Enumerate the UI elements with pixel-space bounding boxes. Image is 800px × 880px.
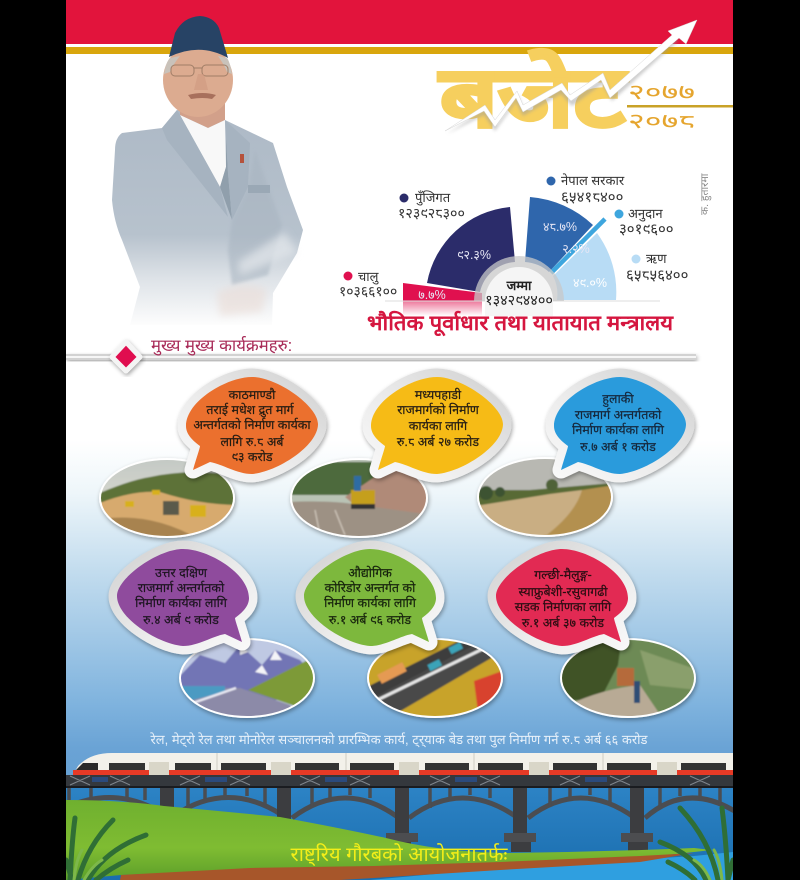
year labels <box>627 81 733 133</box>
percent labels: ९२.३% <box>457 248 491 262</box>
photo: excavation site <box>95 455 240 540</box>
illustration: city flyover <box>365 636 505 720</box>
train <box>73 753 733 775</box>
section heading rule <box>66 354 696 360</box>
header band <box>66 0 733 54</box>
total label <box>485 278 553 309</box>
credit label: क. हुतारमा <box>699 173 712 215</box>
segment: nepal government <box>525 197 593 272</box>
legend: nepal government: नेपाल सरकार <box>561 173 625 188</box>
icon: red diamond <box>112 342 140 371</box>
photo: excavator on hillside <box>288 455 432 540</box>
bubble: industrial corridor: कोरिडोर अन्तर्गत को <box>325 580 416 595</box>
baseline <box>385 300 660 302</box>
percent labels: २.२% <box>562 242 590 256</box>
bubble: mid-hill highway: मध्यपहाडी <box>415 387 462 402</box>
bubble: kathmandu terai expressway: अन्तर्गतको निर्माण कार्यका <box>193 417 311 432</box>
segment: loan <box>553 233 616 300</box>
portrait: prime minister <box>112 16 303 325</box>
total label: जम्मा <box>506 278 532 293</box>
segment: current <box>403 283 482 316</box>
bubble: mid-hill highway: रु.८ अर्ब २७ करोड <box>397 434 479 449</box>
percent labels: ४९.०% <box>573 276 607 290</box>
legend: nepal government <box>546 173 625 206</box>
bubble: north-south highway: निर्माण कार्यका लागि <box>135 595 228 610</box>
bubble: galchhi-rasuwagadhi road: रु.१ अर्ब ३७ करोड <box>522 615 604 630</box>
legend: current: चालु <box>358 269 379 285</box>
section heading: मुख्य मुख्य कार्यक्रमहरु: <box>151 336 292 356</box>
legend: current <box>339 269 397 299</box>
bubble: kathmandu terai expressway: तराई मधेश द्रुत मार्ग <box>206 402 295 418</box>
national pride projects heading: राष्ट्रिय गौरबको आयोजनातर्फः <box>291 843 508 867</box>
title: budget: बजेट <box>438 49 628 144</box>
arches <box>52 798 745 818</box>
year labels: २०७८ <box>628 110 695 133</box>
legend: loan <box>626 251 688 284</box>
legend: nepal government: ६५४१८४०० <box>561 189 623 206</box>
legend: grant: ३०१९६०० <box>619 221 674 238</box>
bubble: kathmandu terai expressway: काठमाण्डौ <box>229 387 276 402</box>
bubble: galchhi-rasuwagadhi road: गल्छी-मैलुङ्ग- <box>534 567 592 583</box>
legend: current: १०३६६१०० <box>339 283 397 299</box>
percent labels <box>418 220 607 302</box>
bubble: north-south highway: राजमार्ग अन्तर्गतको <box>138 580 225 595</box>
suit <box>112 110 303 325</box>
bubble: kathmandu terai expressway <box>186 377 318 474</box>
bubble: mid-hill highway: राजमार्गको निर्माण <box>397 402 480 417</box>
bubble: galchhi-rasuwagadhi road <box>496 549 628 646</box>
bubble: galchhi-rasuwagadhi road: स्याफ्रुबेशी-रसुवागढी <box>518 584 608 600</box>
legend: capital: १२३९२८३०० <box>398 206 465 222</box>
bubble: kathmandu terai expressway: लागि रु.८ अर्ब <box>220 434 285 449</box>
total label: १३४२९४४०० <box>485 293 553 309</box>
year labels: २०७७ <box>628 81 695 104</box>
scene: bridge and river <box>52 753 745 880</box>
neck and face <box>180 100 225 128</box>
chart: budget semicircle <box>385 197 660 316</box>
cap <box>169 16 228 58</box>
hill <box>66 800 712 880</box>
legend: loan: ६५८५६४०० <box>626 267 688 284</box>
river <box>370 852 733 880</box>
legend: loan: ऋण <box>646 251 667 266</box>
segment: grant line <box>551 219 605 273</box>
bubble: postal highway <box>554 377 686 474</box>
hub <box>474 256 564 301</box>
pillars <box>160 788 653 852</box>
segment: capital <box>427 207 515 292</box>
bubble: industrial corridor: रु.१ अर्ब ९६ करोड <box>329 612 411 627</box>
glasses <box>171 65 228 76</box>
bubble: industrial corridor: निर्माण कार्यका लागि <box>324 595 417 610</box>
bubble: north-south highway <box>117 549 249 646</box>
legend: capital: पुँजिगत <box>415 190 451 206</box>
bubble: mid-hill highway: कार्यका लागि <box>409 418 468 433</box>
bubble: kathmandu terai expressway: ९३ करोड <box>231 449 273 464</box>
railway caption: रेल, मेट्रो रेल तथा मोनोरेल सञ्चालनको प्रारम्भिक कार्य, ट्र्याक बेड तथा पुल निर्माण गर्न रु.८ अर्ब ६६ करोड <box>150 732 649 748</box>
bubble: galchhi-rasuwagadhi road: सडक निर्माणका लागि <box>515 599 612 614</box>
legend: grant <box>614 206 674 238</box>
deck <box>66 775 733 786</box>
legend: grant: अनुदान <box>628 206 663 222</box>
photo: dirt highway <box>475 455 615 540</box>
bubble: postal highway: रु.७ अर्ब १ करोड <box>580 439 656 454</box>
illustration: mountain road <box>176 636 318 722</box>
icon: rising arrow <box>445 20 697 134</box>
bubble: postal highway: राजमार्ग अन्तर्गतको <box>575 407 662 422</box>
percent labels: ७.७% <box>418 288 446 302</box>
ministry heading: भौतिक पूर्वाधार तथा यातायात मन्त्रालय <box>367 310 674 337</box>
bubble: postal highway: हुलाकी <box>602 391 634 407</box>
bubble: industrial corridor <box>304 549 436 646</box>
legend: capital <box>398 190 465 222</box>
bank <box>120 853 694 880</box>
percent labels: ४८.७% <box>543 220 577 234</box>
bubble: north-south highway: रु.४ अर्ब ९ करोड <box>143 612 219 627</box>
photo: mountain road with truck <box>558 636 698 722</box>
bubble: north-south highway: उत्तर दक्षिण <box>155 565 208 580</box>
grass tufts <box>66 808 733 880</box>
bubble: postal highway: निर्माण कार्यका लागि <box>572 422 665 437</box>
bubble: mid-hill highway <box>371 377 503 474</box>
bubble: industrial corridor: औद्योगिक <box>348 565 392 580</box>
